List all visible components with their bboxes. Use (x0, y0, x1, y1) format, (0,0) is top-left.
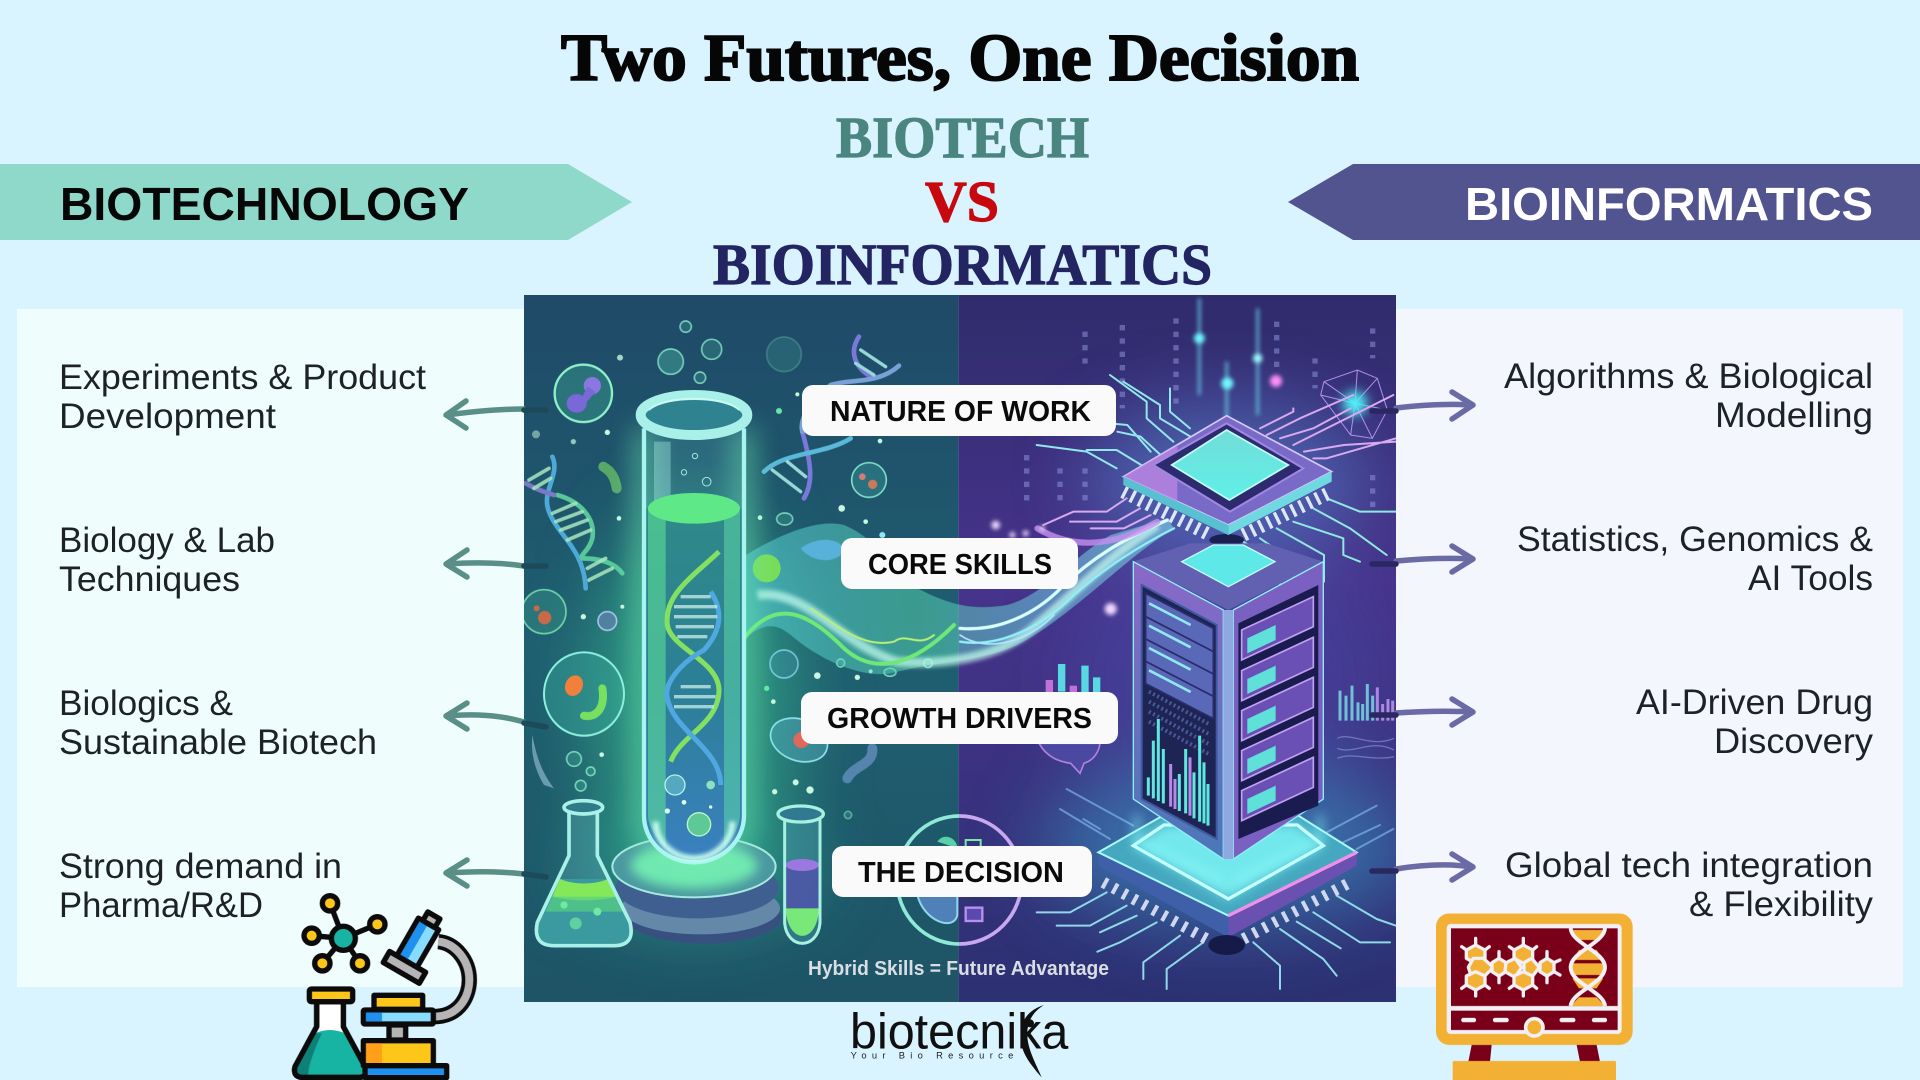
small tube (778, 806, 823, 943)
rack units (1146, 593, 1213, 719)
panel: bioinformatics list: Algorithms & Biological (1504, 357, 1873, 396)
banner: biotechnology: BIOTECHNOLOGY (60, 178, 469, 230)
tower bar chart (1148, 719, 1208, 826)
panel: bioinformatics list: Global tech integration (1505, 846, 1873, 885)
data grid (1149, 692, 1211, 755)
server base (1098, 815, 1357, 955)
chip (1123, 416, 1332, 546)
test tube base (612, 836, 781, 944)
DNA left (526, 457, 622, 588)
right bar chart (1340, 684, 1393, 721)
cell with purple nucleus (555, 365, 612, 422)
banner: biotechnology (0, 164, 632, 240)
cell lower left (522, 590, 617, 634)
control strip (1463, 1019, 1605, 1036)
flask (295, 989, 366, 1077)
server right face (1223, 562, 1323, 859)
large cell (532, 652, 624, 788)
panel: bioinformatics list: Statistics, Genomics & (1517, 520, 1873, 559)
molecule (304, 896, 385, 971)
cell right (852, 463, 886, 497)
panel: biotechnology list: Pharma/R&D (59, 886, 263, 925)
light beams (1194, 298, 1282, 418)
digits as dotted columns (1024, 318, 1376, 507)
heading: VS: VS (925, 169, 999, 234)
pill: core skills (841, 538, 1078, 589)
glow around tower foot (1127, 811, 1330, 860)
faint chart lines (1337, 737, 1394, 758)
panel: biotechnology list: Sustainable Biotech (59, 723, 377, 762)
panel: biotechnology list: Techniques (59, 560, 240, 599)
title: Two Futures, One Decision (561, 21, 1359, 95)
monitor stand (1453, 1061, 1616, 1080)
pill: core skills: CORE SKILLS (868, 549, 1052, 581)
central illustration (522, 295, 1414, 1002)
banner: bioinformatics: BIOINFORMATICS (1465, 178, 1873, 230)
caption: hybrid skills: Hybrid Skills = Future Advantage (808, 958, 1109, 980)
hexagon spokes (1462, 938, 1560, 996)
microscope (363, 905, 469, 1078)
module screens (1247, 625, 1276, 814)
pill: the decision (832, 846, 1092, 897)
panel: biotechnology list: Experiments & Product (59, 358, 426, 397)
heading: BIOINFORMATICS: BIOINFORMATICS (713, 232, 1212, 297)
rack highlights (1149, 603, 1191, 692)
banner: bioinformatics (1288, 164, 1920, 240)
logo: biotecnika: biotecnika (850, 1003, 1069, 1059)
bubbles and dots (567, 321, 932, 819)
pill: nature of work: NATURE OF WORK (830, 396, 1091, 428)
side bar charts (1046, 664, 1100, 692)
logo: biotecnika: Your Bio Resource (851, 1051, 1013, 1061)
digital brain (1039, 743, 1100, 773)
panel: biotechnology list: Strong demand in (59, 847, 342, 886)
server modules (1242, 597, 1313, 821)
bacillus (603, 467, 617, 488)
arrows: bioinformatics (1372, 392, 1473, 880)
pill: growth drivers: GROWTH DRIVERS (827, 703, 1092, 735)
glowing specks (532, 355, 885, 794)
circular decision emblem (897, 816, 1022, 944)
test tube (641, 395, 747, 862)
panel: biotechnology list (17, 309, 524, 987)
pill: the decision: THE DECISION (858, 857, 1064, 889)
panel: bioinformatics list (1396, 309, 1903, 987)
panel: bioinformatics list: Discovery (1714, 722, 1874, 761)
panel: bioinformatics list: AI-Driven Drug (1636, 683, 1873, 722)
flask (536, 801, 631, 946)
panel: bioinformatics list: & Flexibility (1689, 885, 1874, 924)
arrows: biotechnology (446, 401, 546, 886)
panel: bioinformatics list: AI Tools (1748, 559, 1873, 598)
network node (1321, 370, 1387, 438)
circuit traces (1037, 375, 1396, 989)
monitor legs (1468, 1045, 1600, 1062)
pill: nature of work (802, 385, 1116, 436)
cell behind growth pill (764, 711, 872, 778)
server tower top (1133, 543, 1323, 610)
panel: bioinformatics list: Modelling (1715, 396, 1873, 435)
hexagon molecule (1466, 945, 1554, 990)
flowing ribbon (741, 518, 1174, 674)
pill: growth drivers (801, 692, 1118, 744)
DNA helix (1571, 928, 1605, 1006)
server left face (1133, 562, 1223, 859)
icon: molecule, flask and microscope (295, 896, 469, 1078)
panel: biotechnology list: Biology & Lab (59, 521, 275, 560)
panel: biotechnology list: Development (59, 397, 276, 436)
heading: BIOTECH: BIOTECH (836, 105, 1089, 170)
icon: bioinformatics monitor (1436, 913, 1633, 1080)
panel: biotechnology list: Biologics & (59, 684, 233, 723)
background glows (567, 402, 1414, 925)
DNA upper right (764, 337, 899, 498)
